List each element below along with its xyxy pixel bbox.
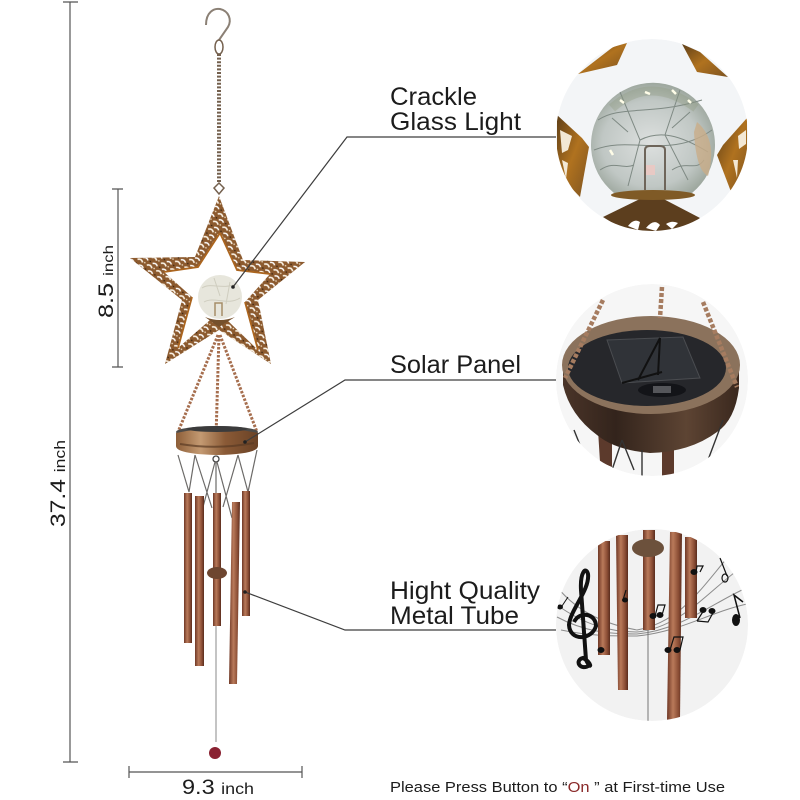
icon: treble clef [569, 571, 596, 667]
dimension: width 9.3 inch: 9.3 inch [182, 776, 254, 799]
disc side [563, 372, 739, 453]
label: crackle glass light: Glass Light [390, 108, 521, 136]
dimension: star height 8.5 inch: 8.5 inch [95, 245, 118, 318]
callout line: crackle glass [231, 137, 556, 289]
string [648, 630, 649, 721]
dark disc top [568, 330, 726, 406]
label: crackle glass light: Crackle [390, 83, 477, 111]
chains [565, 287, 737, 387]
detail circle: solar panel [556, 284, 748, 476]
dimension: total height 37.4 inch [47, 2, 78, 762]
dimension: star height 8.5 inch [95, 189, 123, 367]
footer note: Please Press Button to “ On ” at First-time Use [390, 780, 725, 796]
red bead [209, 747, 221, 759]
upper hanging chains [178, 335, 257, 437]
dimension: total height 37.4 inch: 37.4 inch [47, 440, 70, 527]
glass globe [591, 83, 715, 193]
label: metal tube: Hight Quality [390, 577, 541, 605]
lower tubes [598, 436, 674, 476]
detail circle: metal tube [556, 529, 748, 722]
icon: hook [206, 9, 230, 40]
striker string [215, 626, 217, 742]
wind chime product [130, 9, 305, 759]
medallion [207, 567, 227, 579]
metal tubes [184, 491, 250, 684]
hanging wires [178, 450, 257, 518]
star base fragment [603, 200, 700, 231]
wires [574, 420, 723, 476]
disc rim [562, 316, 740, 414]
crackle glass globe [198, 275, 242, 327]
music notes [558, 558, 743, 652]
globe base rim [611, 190, 695, 200]
star frame [130, 196, 305, 364]
tubes [598, 530, 697, 720]
upper chain [214, 40, 224, 194]
dimension: width 9.3 inch [129, 766, 302, 799]
star fragments [557, 43, 747, 197]
switch [638, 383, 686, 397]
solar cell [607, 337, 700, 383]
medallion [632, 539, 664, 557]
label: metal tube: Metal Tube [390, 602, 519, 630]
label: metal tube [390, 577, 541, 630]
callout line: metal tube [243, 590, 556, 630]
label: crackle glass light [390, 83, 521, 136]
callout line: solar panel [243, 380, 556, 444]
staff lines [557, 557, 747, 636]
label: solar panel: Solar Panel [390, 351, 521, 379]
solar disc [176, 426, 258, 462]
inner chain [622, 338, 662, 383]
detail circle: crackle glass light [556, 39, 748, 232]
